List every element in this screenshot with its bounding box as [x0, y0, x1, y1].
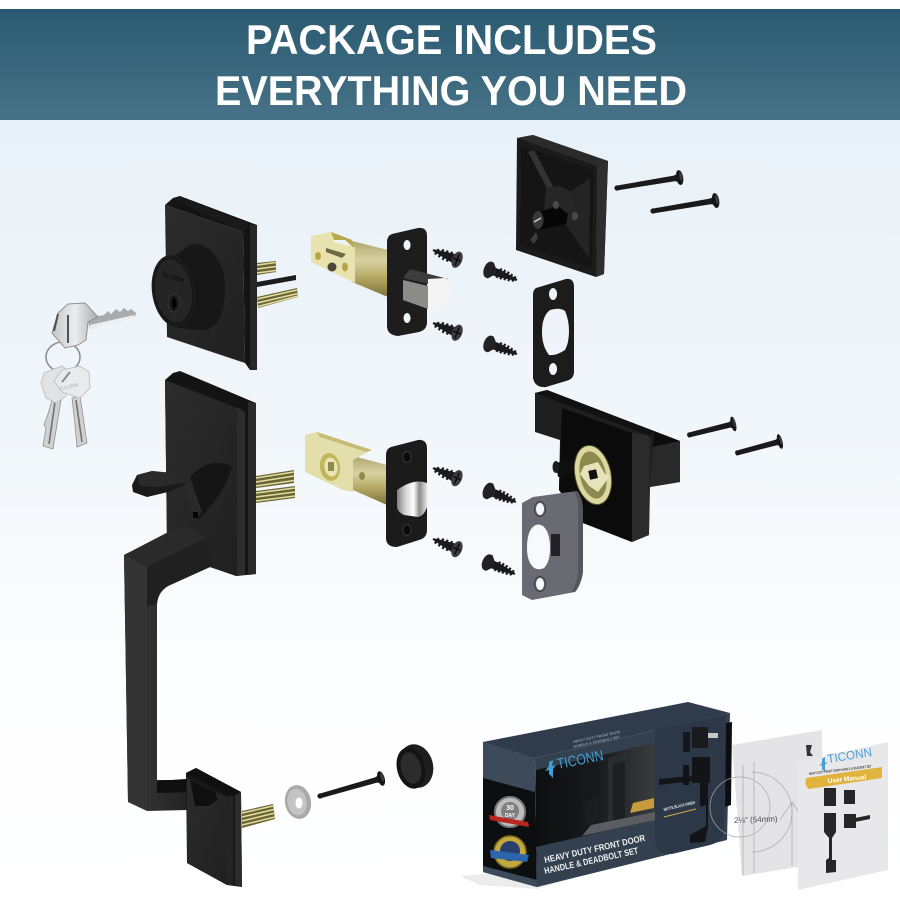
- badge: satisfaction: [490, 836, 529, 868]
- manual hardware: [824, 788, 870, 873]
- badge: 30 day: DAY: [505, 813, 516, 819]
- installation template sheet: [710, 730, 822, 876]
- deadbolt back plate: [516, 135, 608, 277]
- spindle post: [552, 458, 576, 477]
- handle interior back plate: [535, 390, 680, 542]
- handle latch: [305, 432, 427, 547]
- title: PACKAGE INCLUDES: [246, 16, 657, 63]
- deadbolt rose plate: [165, 196, 257, 370]
- latch housing: [311, 232, 388, 297]
- latch faceplate holes: [403, 452, 411, 536]
- screws: deadbolt latch: [430, 242, 520, 362]
- key: lower left: [41, 366, 70, 449]
- box top text: [573, 730, 621, 753]
- title: EVERYTHING YOU NEED: [215, 67, 687, 114]
- deadbolt strike plate: [533, 279, 574, 387]
- box title: HANDLE & DEADBOLT SET: [543, 845, 640, 876]
- deadbolt latch: [311, 228, 449, 336]
- black edge strip: [725, 722, 732, 807]
- brass ring: [569, 442, 617, 508]
- manual logo: TICONN: [826, 745, 873, 766]
- handle strike plate: [522, 491, 583, 600]
- lower pins: [242, 804, 275, 828]
- key: top: [52, 303, 136, 348]
- box left side: [483, 742, 537, 887]
- washer: [282, 783, 314, 821]
- mounting screw: [315, 770, 387, 804]
- keys: [41, 303, 136, 449]
- title: [215, 16, 687, 114]
- header banner: [0, 9, 900, 120]
- handle rose plate: [165, 371, 256, 576]
- long screws: top right: [613, 170, 720, 219]
- deadbolt cylinder: TICONN: [160, 272, 184, 284]
- screws: handle latch: [430, 460, 519, 582]
- mini deadbolt: [683, 727, 718, 752]
- deadbolt exterior: [147, 196, 298, 370]
- latch faceplate: [387, 228, 427, 336]
- box hardware panel: [655, 714, 732, 854]
- box shadow: [460, 870, 560, 889]
- box top text: MATTE BLACK FINISH: [578, 741, 616, 753]
- deadbolt tailpiece pins: [257, 261, 298, 308]
- handle pins: [256, 470, 295, 503]
- deadbolt cylinder: [147, 244, 225, 330]
- manual band: User Manual: [827, 774, 867, 785]
- box photo: [536, 743, 655, 847]
- installation template sheet: 2⅛" (54mm): [734, 814, 778, 825]
- key ring: [46, 342, 80, 372]
- manual band: [805, 767, 882, 789]
- key: lower right: TICONN: [59, 382, 79, 393]
- box top face: [483, 702, 730, 758]
- mini handle: [659, 757, 710, 843]
- deadbolt: [403, 269, 449, 310]
- finish label: MATTE BLACK FINISH: [663, 800, 695, 812]
- thumb lever: [132, 471, 202, 520]
- key: lower right: [54, 366, 90, 447]
- user manual sheet: [798, 742, 888, 890]
- box top text: HANDLE & DEADBOLT SET: [573, 735, 621, 749]
- lower rose plate: [186, 768, 242, 887]
- latch faceplate 2: [386, 440, 427, 547]
- long screws: right: [685, 416, 784, 461]
- door handle: [124, 371, 295, 887]
- product box: [460, 702, 732, 889]
- box logo: TICONN: [556, 747, 605, 773]
- manual logo: [819, 745, 873, 772]
- box logo: [545, 747, 605, 778]
- grip: [124, 525, 210, 811]
- latch housing 2: [305, 432, 387, 505]
- finish label: [662, 800, 706, 842]
- spring latch: [397, 482, 427, 517]
- badge: 30 day: [489, 797, 529, 827]
- badge: 30 day: 30: [506, 805, 514, 812]
- box title: HEAVY DUTY FRONT DOOR: [543, 833, 646, 865]
- cap ring: [392, 741, 438, 792]
- back plate mechanism: [528, 150, 590, 258]
- box front face: [535, 713, 732, 887]
- box top text: HEAVY DUTY FRONT DOOR: [573, 730, 621, 744]
